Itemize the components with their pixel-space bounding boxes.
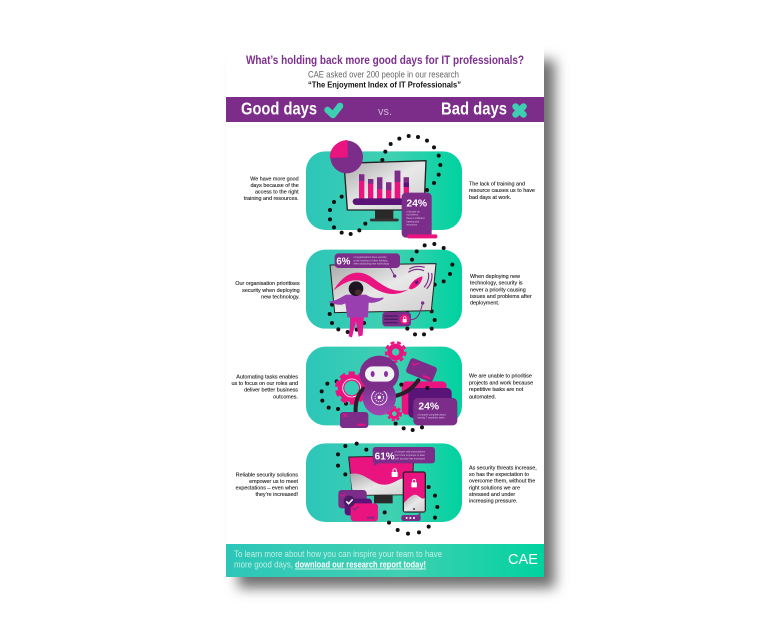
desktop monitor	[349, 456, 414, 503]
callout: 6%: of organisations have security	[353, 256, 387, 259]
callout: 61%	[373, 447, 435, 466]
heading: bad days: Bad days	[441, 98, 507, 118]
subtitle: “The Enjoyment Index of IT Professionals”	[308, 81, 461, 90]
vs label: vs.	[378, 106, 392, 118]
right text column: bad days reasons: bad days at work.	[469, 195, 511, 201]
robot	[356, 356, 418, 415]
dotted ring	[336, 442, 439, 536]
left text column: good days reasons: training and resources.	[244, 196, 299, 202]
left text column: good days reasons: empower us to meet	[249, 479, 298, 485]
right text column: bad days reasons: right solutions we are	[469, 485, 520, 491]
subtitle	[308, 70, 461, 90]
pie chart	[330, 140, 363, 173]
left text column: good days reasons: days because of the	[250, 183, 299, 189]
phone	[403, 472, 425, 512]
callout: 24%: there is sufficient	[406, 217, 425, 220]
left text column: good days reasons: Reliable security solutions	[236, 472, 298, 478]
dotted ring	[328, 242, 454, 336]
left text column: good days reasons: Automating tasks enables	[236, 374, 298, 380]
subtitle: CAE asked over 200 people in our research	[308, 70, 459, 80]
dotted ring	[328, 134, 442, 236]
right text column: bad days reasons: We are unable to prioritise	[469, 374, 532, 380]
dotted ring	[320, 379, 424, 432]
footer text	[234, 549, 442, 569]
callout: 6%: at the forefront of their thinking	[353, 259, 388, 262]
stacked folders	[402, 381, 452, 418]
callout: 61%: from their employer to deal	[395, 454, 425, 457]
left text column: good days reasons: security when deploying	[242, 288, 300, 294]
pink wave	[333, 273, 408, 294]
stacked folders with check	[338, 490, 378, 521]
callout: 24%: 24%	[406, 199, 427, 210]
page background	[226, 45, 544, 577]
left text column: good days reasons: access to the right	[255, 190, 299, 196]
icon: rocket with signal arcs	[408, 266, 432, 289]
footer call to action	[226, 544, 544, 577]
callout: 24%: of people complain about	[418, 413, 446, 416]
left text column: good days reasons: We have more good	[250, 176, 299, 182]
briefcase left	[340, 412, 368, 428]
presentation screen	[330, 264, 436, 313]
right text column: bad days reasons: As security threats increase,	[469, 465, 537, 471]
right text column: bad days reasons: technology, security is	[470, 281, 523, 287]
callout: 24%: 24%	[418, 402, 439, 413]
panel: training illustration	[306, 134, 462, 238]
right text column: bad days reasons: issues and problems after	[470, 294, 532, 300]
icon: cross	[516, 106, 524, 114]
callout: 24%: training and	[406, 220, 420, 223]
left text column: good days reasons	[231, 176, 300, 498]
monitor	[344, 161, 426, 221]
speech bubble	[401, 512, 421, 521]
right text column: bad days reasons: never a priority causing	[470, 287, 526, 293]
left text column: good days reasons: deliver better business	[244, 388, 298, 394]
title: What’s holding back more good days for IT professionals?	[246, 53, 524, 67]
right text column: bad days reasons: When deploying new	[470, 274, 520, 280]
callout: 24%	[402, 193, 437, 238]
footer text: more good days,	[234, 559, 293, 569]
icon: check mark	[328, 106, 340, 115]
panel: security expectations illustration	[306, 442, 462, 536]
gears	[337, 342, 405, 420]
callout: 24%: resources	[406, 224, 418, 227]
left text column: good days reasons: outcomes.	[273, 394, 298, 400]
callout: 24%	[413, 398, 457, 425]
left text column: good days reasons: they’re increased!	[255, 492, 298, 498]
right text column: bad days reasons: projects and work because	[469, 380, 533, 386]
left text column: good days reasons: new technology.	[261, 294, 300, 300]
callout: 6%	[335, 253, 400, 278]
right text column: bad days reasons: so has the expectation to	[469, 472, 529, 478]
panel: automation illustration	[306, 342, 462, 432]
left text column: good days reasons: Our organisation prioritises	[235, 281, 300, 287]
CAE logo: CAE	[508, 551, 538, 568]
callout: 24%: not believe	[406, 214, 419, 217]
lock card	[382, 301, 424, 326]
right text column: bad days reasons: overcome them, without the	[469, 479, 535, 485]
right text column: bad days reasons: repetitive tasks are not	[469, 387, 524, 393]
panel: security deployment illustration	[306, 242, 462, 337]
right text column: bad days reasons	[469, 182, 537, 505]
right text column: bad days reasons: automated.	[469, 394, 496, 400]
callout: 6%: when deploying new technology	[353, 263, 390, 266]
callout: 6%: 6%	[336, 256, 351, 267]
footer text: download our research report today!	[295, 559, 426, 569]
left text column: good days reasons: expectations – even when	[236, 486, 298, 492]
left text column: good days reasons: us to focus on our roles and	[231, 381, 298, 387]
callout: 61%: of people said expectations	[395, 450, 426, 453]
heading: good days: Good days	[241, 98, 317, 118]
right text column: bad days reasons: stressed and under	[469, 492, 515, 498]
right text column: bad days reasons: The lack of training and	[469, 182, 525, 188]
callout: 61%: 61%	[375, 451, 395, 462]
right text column: bad days reasons: increasing pressure.	[469, 499, 518, 505]
callout: 61%: with security has increased	[395, 458, 425, 461]
page shadow	[238, 60, 555, 588]
bar chart	[353, 171, 409, 205]
briefcase top right	[405, 357, 438, 383]
header band: good days vs bad days	[226, 97, 544, 122]
footer text: To learn more about how you can inspire your team to have	[234, 549, 442, 559]
person presenting	[329, 281, 383, 337]
right text column: bad days reasons: deployment.	[470, 301, 499, 307]
right text column: bad days reasons: resource causes us to have	[469, 188, 535, 194]
callout: 24%: of people do	[406, 210, 420, 213]
callout: 24%: having 7 repetitive tasks	[418, 417, 445, 420]
